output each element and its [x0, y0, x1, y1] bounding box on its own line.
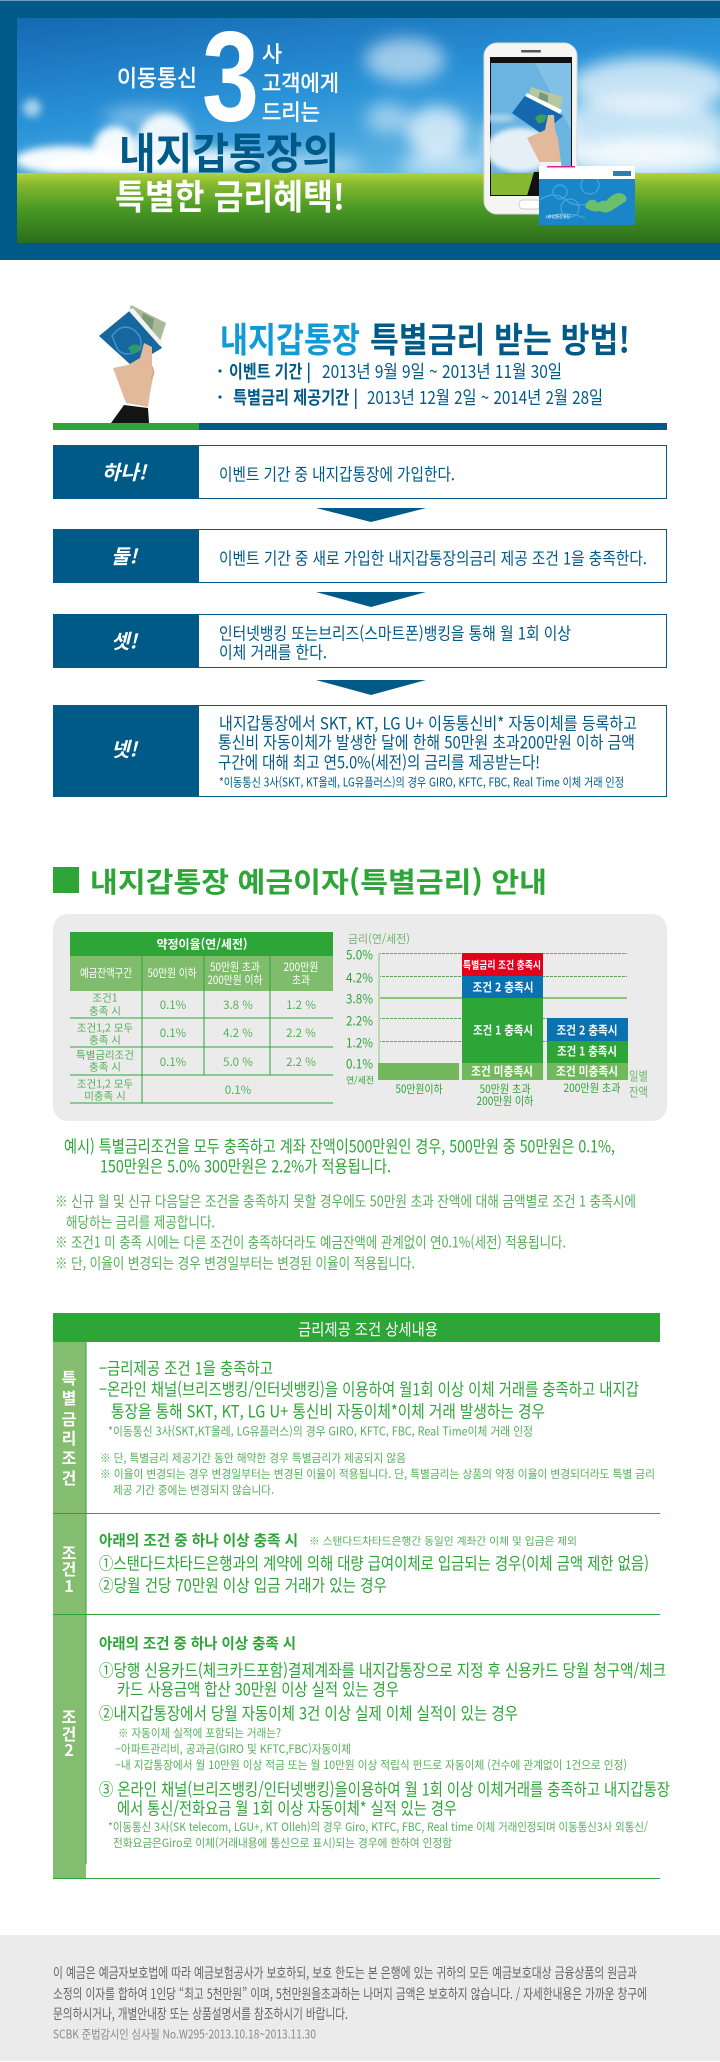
rate table: 0.1% [160, 997, 187, 1013]
heading rule [53, 423, 667, 430]
row: special rate condition: 조 [62, 1445, 77, 1469]
step 2: 이벤트 기간 중 새로 가입한 내지갑통장의금리 제공 조건 1을 충족한다. [219, 544, 647, 570]
bar chart: 0.1% [346, 1054, 373, 1072]
row: special rate condition: ※ 단, 특별금리 제공기간 동안 해약한 경우 특별금리가 제공되지 않음 [100, 1450, 406, 1466]
rate table: 약정이율(연/세전) [156, 936, 248, 952]
step 2 [53, 529, 666, 583]
notes [55, 1190, 636, 1274]
rate table: 50만원 초과 [210, 959, 260, 975]
bar chart: 금리(연/세전) [348, 931, 410, 947]
row: special rate condition: 별 [62, 1385, 76, 1409]
bar chart: 5.0% [346, 944, 373, 964]
event period [218, 358, 562, 384]
step 4: 구간에 대해 최고 연5.0%(세전)의 금리를 제공받는다! [218, 748, 540, 774]
step 4: 통신비 자동이체가 발생한 달에 한해 50만원 초과200만원 이하 금액 [218, 728, 635, 754]
row: condition 2: 아래의 조건 중 하나 이상 충족 시 [99, 1632, 296, 1654]
rate table: 조건1,2 모두 [77, 1020, 133, 1036]
bar chart: 50만원 초과 [480, 1081, 531, 1097]
rate table: 예금잔액구간 [80, 965, 132, 981]
row: condition 2: *이동통신 3사(SK telecom, LGU+, KT Olleh)의 경우 Giro, KTFC, FBC, Real time 이체 거래인정되며 이동통신3사 외통신/ [108, 1819, 648, 1835]
rate table: 5.0 % [223, 1054, 253, 1070]
rate table: 2.2 % [286, 1025, 316, 1041]
rate table: 미충족 시 [84, 1088, 126, 1104]
rate table: 3.8 % [223, 997, 253, 1013]
row: condition 2: −내 지갑통장에서 월 10만원 이상 적금 또는 월 10만원 이상 적립식 펀드로 자동이체 (건수에 관계없이 1건으로 인정) [115, 1757, 627, 1773]
detail table header [53, 1313, 660, 1342]
arrow 1 [316, 508, 426, 522]
row: special rate condition: 금 [62, 1406, 77, 1430]
rate table: 0.1% [160, 1054, 187, 1070]
event period: 2013년 9월 9일 ~ 2013년 11월 30일 [322, 358, 562, 384]
detail table header: 금리제공 조건 상세내용 [298, 1316, 438, 1340]
bar chart: 조건 1 충족시 [473, 1022, 533, 1038]
example text: 예시) 특별금리조건을 모두 충족하고 계좌 잔액이500만원인 경우, 500만원 중 50만원은 0.1%, [64, 1132, 615, 1158]
row: condition 2: 조 [62, 1704, 77, 1728]
panel: rates [53, 914, 667, 1121]
banner headline: 3 [202, 6, 259, 148]
bar chart [346, 931, 648, 1109]
panel: rate conditions detail [53, 1313, 670, 1878]
example text [64, 1132, 615, 1178]
rate table: 0.1% [160, 1025, 187, 1041]
step 4 [53, 705, 666, 797]
rate table: 0.1% [225, 1082, 252, 1098]
bar chart: 200만원 초과 [564, 1080, 621, 1096]
row: condition 1: 조 [62, 1540, 77, 1564]
step 3 [53, 614, 666, 668]
row: special rate condition: −온라인 채널(브리즈뱅킹/인터넷뱅킹)을 이용하여 월1회 이상 이체 거래를 충족하고 내지갑 [99, 1376, 639, 1400]
row: special rate condition: 제공 기간 중에는 변경되지 않습니다. [113, 1482, 274, 1498]
heading: how to get the special rate: 특별금리 받는 방법! [370, 312, 630, 364]
bar chart: 조건 미충족시 [471, 1062, 533, 1080]
step 1: 이벤트 기간 중 내지갑통장에 가입한다. [219, 460, 455, 486]
banner headline: 고객에게 [262, 66, 339, 98]
bar chart: 잔액 [629, 1082, 648, 1100]
icon: hand holding wallet [99, 305, 166, 423]
footer disclaimer: SCBK 준법감시인 심사필 No.W295-2013.10.18~2013.11.30 [53, 2026, 316, 2042]
row: condition 2: 건 [62, 1721, 76, 1745]
bar chart: 특별금리 조건 충족시 [463, 958, 541, 972]
banner headline: 이동통신 [117, 59, 197, 93]
banner headline: 특별한 금리혜택! [115, 170, 345, 220]
rate table: 충족 시 [89, 1004, 121, 1018]
row: condition 2: 2 [64, 1737, 74, 1761]
rate table: 조건1 [92, 990, 118, 1006]
bar chart: 조건 2 충족시 [556, 1022, 618, 1038]
notes: ※ 조건1 미 충족 시에는 다른 조건이 충족하더라도 예금잔액에 관계없이 연0.1%(세전) 적용됩니다. [55, 1232, 566, 1252]
bar chart: 일별 [629, 1066, 648, 1084]
row: condition 2: ②내지갑통장에서 당월 자동이체 3건 이상 실제 이체 실적이 있는 경우 [99, 1700, 518, 1724]
footer disclaimer: 문의하시거나, 개별안내장 또는 상품설명서를 참조하시기 바랍니다. [53, 2004, 348, 2024]
heading: how to get the special rate [220, 312, 630, 364]
icon: passbook card: 내지갑통장 통장 [546, 213, 570, 220]
row: special rate condition: *이동통신 3사(SKT,KT올레, LG유플러스)의 경우 GIRO, KFTC, FBC, Real Time이체 거래 인정 [108, 1422, 533, 1440]
icon: passbook card [539, 166, 635, 225]
rate table: 2.2 % [286, 1054, 316, 1070]
row: special rate condition: ※ 이율이 변경되는 경우 변경일부터는 변경된 이율이 적용됩니다. 단, 특별금리는 상품의 약정 이율이 변경되더라도 특별 금리 [100, 1466, 655, 1482]
row: condition 1: 아래의 조건 중 하나 이상 충족 시 [99, 1530, 298, 1550]
banner headline [115, 6, 345, 220]
step 1 [53, 445, 666, 499]
banner background: sky and grass field [15, 18, 720, 243]
row: condition 2: 에서 통신/전화요금 월 1회 이상 자동이체* 실적 있는 경우 [117, 1794, 457, 1820]
row: condition 1: 건 [62, 1556, 76, 1580]
icon: smartphone [484, 43, 577, 214]
bar chart: 1.2% [346, 1032, 373, 1052]
rate table: 초과 [292, 972, 310, 988]
rate table: 50만원 이하 [148, 965, 197, 981]
row: condition 2: 전화요금은Giro로 이체(거래내용에 통신으로 표시)되는 경우에 한하여 인정함 [113, 1835, 452, 1851]
row: condition 1: ※ 스탠다드차타드은행간 동일인 계좌간 이체 및 입금은 제외 [309, 1534, 577, 1548]
section heading: interest guide: 내지갑통장 예금이자(특별금리) 안내 [90, 861, 547, 901]
rate table: 조건1,2 모두 [77, 1076, 133, 1092]
step 1: 하나! [102, 456, 148, 486]
footer disclaimer [0, 1935, 720, 2061]
step 3: 이체 거래를 한다. [219, 638, 327, 664]
bar chart: 조건 2 충족시 [472, 978, 534, 996]
rate table: 충족 시 [89, 1060, 121, 1074]
event period: 이벤트 기간 | [229, 358, 311, 384]
rate table: 1.2 % [286, 997, 316, 1013]
bar chart: 3.8% [346, 988, 373, 1008]
rate table: 4.2 % [223, 1025, 253, 1041]
row: special rate condition: 건 [62, 1465, 76, 1489]
row: condition 1: ②당월 건당 70만원 이상 입금 거래가 있는 경우 [99, 1572, 387, 1596]
example text: 150만원은 5.0% 300만원은 2.2%가 적용됩니다. [100, 1152, 391, 1178]
row: special rate condition: 통장을 통해 SKT, KT, LG U+ 통신비 자동이체*이체 거래 발생하는 경우 [111, 1398, 545, 1422]
bar chart: 4.2% [346, 968, 373, 986]
banner headline: 내지갑통장의 [119, 120, 339, 182]
row: condition 2: 카드 사용금액 합산 30만원 이상 실적 있는 경우 [117, 1676, 399, 1700]
row: condition 2 [62, 1632, 670, 1851]
special rate period: 특별금리 제공기간 | [233, 384, 358, 410]
rate table: 200만원 [284, 959, 318, 975]
step 3: 셋! [111, 626, 138, 654]
row: condition 1 [62, 1530, 649, 1597]
row: condition 2: −아파트관리비, 공과금(GIRO 및 KFTC,FBC)자동이체 [115, 1741, 351, 1757]
bar chart: 50만원이하 [396, 1081, 443, 1097]
special rate period [218, 384, 603, 410]
heading: how to get the special rate: 내지갑통장 [220, 312, 360, 364]
step 3: 인터넷뱅킹 또는브리즈(스마트폰)뱅킹을 통해 월 1회 이상 [219, 620, 571, 644]
rate table: 특별금리조건 [76, 1048, 134, 1062]
bar chart: 2.2% [346, 1010, 373, 1030]
bar chart: 연/세전 [346, 1074, 374, 1086]
rate table: 200만원 이하 [208, 972, 263, 988]
banner [0, 0, 720, 260]
banner headline: 드리는 [262, 95, 320, 127]
rate table: 충족 시 [89, 1032, 121, 1048]
row: condition 1: 1 [64, 1573, 74, 1597]
bar chart: 조건 미충족시 [556, 1062, 618, 1080]
step 4: 넷! [111, 734, 138, 762]
notes: 해당하는 금리를 제공합니다. [66, 1212, 215, 1232]
bar chart: 200만원 이하 [476, 1093, 534, 1109]
row: special rate condition: −금리제공 조건 1을 충족하고 [99, 1354, 273, 1380]
arrow 2 [316, 592, 426, 607]
arrow 3 [316, 680, 426, 695]
rate table [70, 932, 333, 1104]
notes: ※ 단, 이율이 변경되는 경우 변경일부터는 변경된 이율이 적용됩니다. [55, 1252, 415, 1274]
row: special rate condition: 특 [62, 1365, 77, 1389]
step 4: *이동통신 3사(SKT, KT올레, LG유플러스)의 경우 GIRO, KFTC, FBC, Real Time 이체 거래 인정 [219, 774, 624, 790]
bar chart: 조건 1 충족시 [557, 1042, 617, 1060]
row: special rate condition [62, 1354, 655, 1498]
row: special rate condition: 리 [62, 1425, 76, 1449]
special rate period: 2013년 12월 2일 ~ 2014년 2월 28일 [367, 384, 603, 410]
banner headline: 사 [262, 37, 282, 69]
step 4: 내지갑통장에서 SKT, KT, LG U+ 이동통신비* 자동이체를 등록하고 [219, 710, 637, 734]
row: condition 2: ※ 자동이체 실적에 포함되는 거래는? [118, 1725, 281, 1741]
step 2: 둘! [111, 540, 138, 570]
